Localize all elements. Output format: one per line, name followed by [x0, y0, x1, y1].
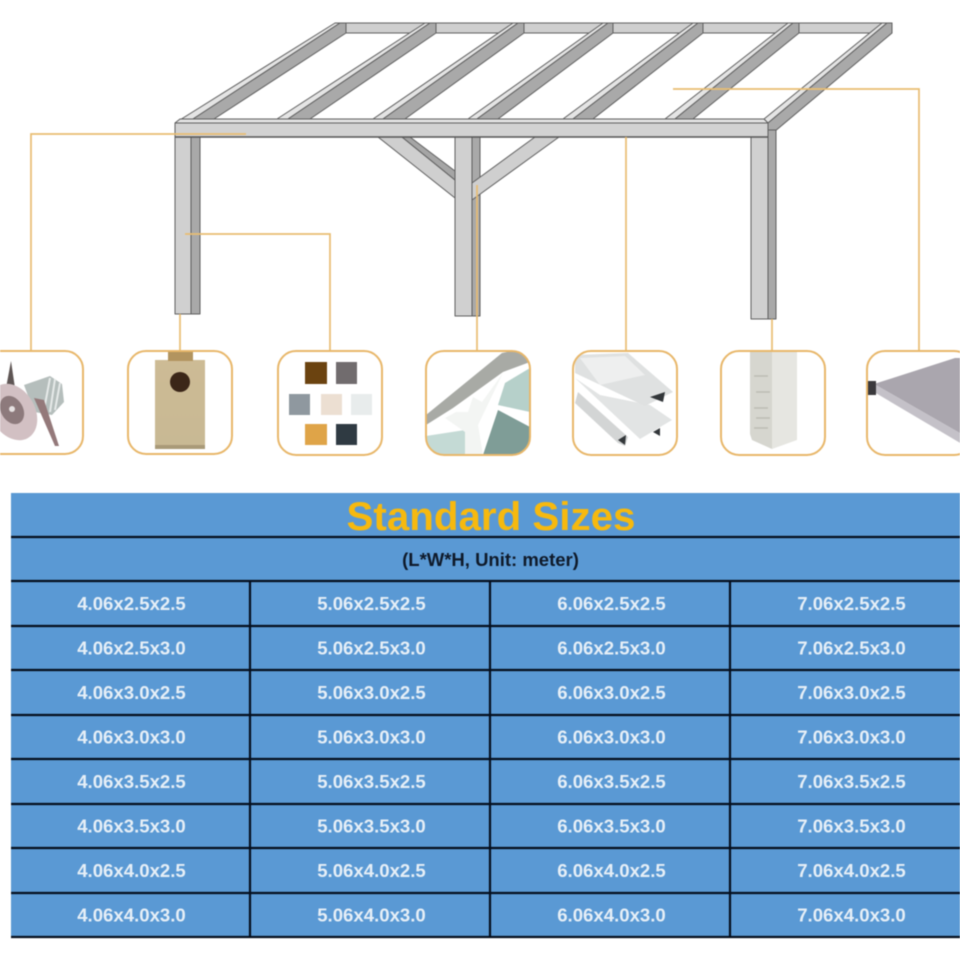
table values: 6.06x2.5x3.0	[557, 638, 666, 658]
table values: 4.06x2.5x2.5	[77, 593, 186, 614]
card: aluminium profile	[573, 351, 677, 455]
rafters	[175, 23, 892, 137]
table background	[11, 493, 960, 938]
table values: 6.06x4.0x2.5	[557, 860, 666, 881]
icon: heat sink body	[24, 376, 64, 415]
left brace	[378, 137, 455, 198]
title: Standard Sizes	[347, 494, 635, 539]
right brace	[472, 137, 559, 200]
left post	[175, 137, 200, 314]
table values: 5.06x4.0x3.0	[317, 904, 426, 926]
middle post	[455, 137, 480, 316]
table values: 7.06x4.0x3.0	[797, 904, 906, 926]
card: polycarbonate roof panel	[867, 351, 960, 455]
table values: 7.06x2.5x2.5	[797, 593, 906, 614]
table values: 7.06x3.0x2.5	[797, 682, 906, 703]
table values: 4.06x3.5x3.0	[77, 816, 186, 836]
table values: 6.06x3.0x3.0	[557, 726, 666, 748]
card: colour swatches	[278, 351, 382, 455]
table values: 4.06x3.0x3.0	[77, 726, 186, 748]
card: wood-effect post	[721, 351, 825, 455]
table values: 4.06x4.0x3.0	[77, 904, 186, 926]
back beam	[336, 23, 892, 33]
table values: 7.06x4.0x2.5	[797, 860, 906, 881]
table values: 7.06x3.5x3.0	[797, 816, 906, 836]
table values: 4.06x3.0x2.5	[77, 682, 186, 703]
front beam	[175, 119, 768, 137]
table values: 5.06x3.5x2.5	[317, 771, 426, 792]
callout connector lines	[31, 89, 919, 351]
table values: 4.06x3.5x2.5	[77, 771, 186, 792]
right post	[751, 130, 776, 319]
table grid	[11, 537, 960, 937]
table values: 4.06x4.0x2.5	[77, 860, 186, 881]
card: concrete footing	[128, 351, 232, 454]
icon: screw head and blades	[0, 361, 59, 449]
card: decorative brace photo	[426, 351, 530, 455]
table values: 6.06x3.5x3.0	[557, 816, 666, 836]
table values: 4.06x2.5x3.0	[77, 638, 186, 658]
table values: 6.06x3.5x2.5	[557, 771, 666, 792]
table values	[77, 593, 906, 926]
table values: 7.06x3.5x2.5	[797, 771, 906, 792]
table values: 5.06x3.5x3.0	[317, 816, 426, 836]
table values: 6.06x2.5x2.5	[557, 593, 666, 614]
card: screw fastener	[0, 351, 83, 454]
table values: 5.06x3.0x3.0	[317, 726, 426, 748]
table values: 7.06x3.0x3.0	[797, 726, 906, 748]
table values: 5.06x2.5x2.5	[317, 593, 426, 614]
table values: 5.06x4.0x2.5	[317, 860, 426, 881]
table values: 5.06x2.5x3.0	[317, 638, 426, 658]
table values: 5.06x3.0x2.5	[317, 682, 426, 703]
pergola frame structure	[175, 23, 892, 319]
standard sizes table	[11, 493, 960, 938]
table values: 6.06x4.0x3.0	[557, 904, 666, 926]
table values: 6.06x3.0x2.5	[557, 682, 666, 703]
table values: 7.06x2.5x3.0	[797, 638, 906, 658]
unit subtitle: (L*W*H, Unit: meter)	[402, 549, 579, 570]
